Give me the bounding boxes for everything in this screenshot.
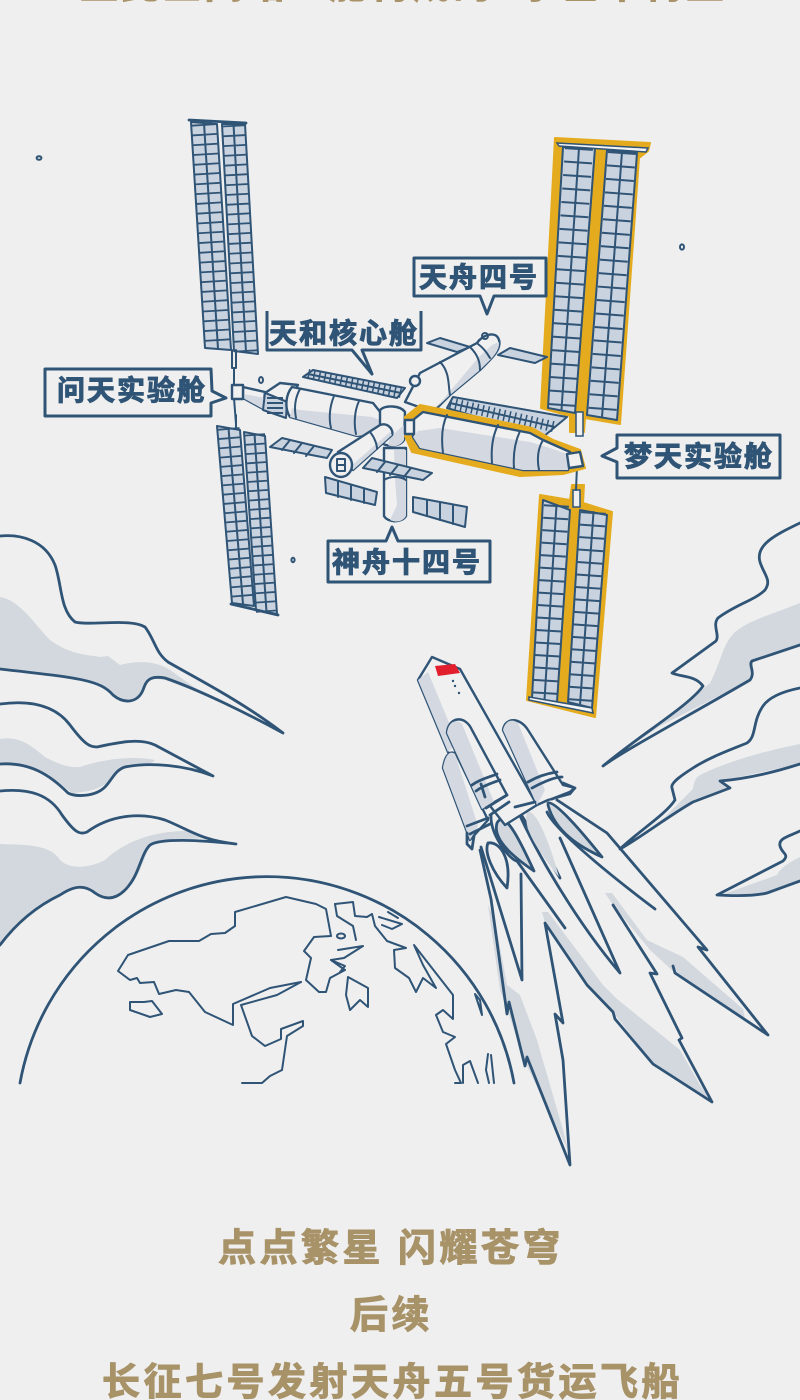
- label: Wentian module: [45, 369, 226, 416]
- clouds: left: [0, 536, 283, 945]
- rocket core stage: [418, 657, 537, 825]
- closing caption: [102, 1228, 683, 1400]
- label: Tianhe core module: [267, 311, 421, 374]
- Shenzhou-14 crewed craft with panels: [325, 448, 467, 527]
- solar array: Mengtian lower, highlighted in yellow: [527, 466, 612, 717]
- line: twinkling stars: 点点繁星 闪耀苍穹: [218, 1228, 564, 1270]
- rocket and exhaust flames: [418, 657, 768, 1165]
- solar array: Wentian lower: [217, 398, 278, 615]
- continents: [118, 897, 494, 1083]
- exhaust flames: [480, 800, 768, 1165]
- Tianzhou-4 cargo craft with panels: [405, 333, 547, 412]
- label: Mengtian module: 梦天实验舱: [624, 441, 774, 472]
- Tianhe core module: [232, 377, 385, 436]
- centre booster: [447, 719, 509, 815]
- line: follow-up: 后续: [350, 1295, 433, 1337]
- solar array: Wentian upper: [189, 120, 258, 386]
- clouds: right: [603, 523, 800, 896]
- star dots: [37, 156, 684, 562]
- space station core: [232, 333, 585, 527]
- label: Tianhe core module: 天和核心舱: [269, 318, 419, 349]
- label: Wentian module: 问天实验舱: [57, 375, 207, 406]
- left booster: [443, 753, 490, 849]
- earth globe with continents: [20, 877, 514, 1083]
- Mengtian solar wing: [447, 397, 567, 437]
- top caption cut off by the page edge: [80, 0, 728, 7]
- right booster: [503, 720, 575, 807]
- solar array: Mengtian upper, highlighted in yellow: [541, 138, 650, 436]
- Tianhe solar wing: [303, 370, 405, 398]
- label: Mengtian module: [602, 435, 780, 478]
- label: Shenzhou-14: [328, 527, 490, 582]
- central node: [380, 406, 405, 446]
- label: Tianzhou-4: [414, 258, 546, 314]
- red nose stripe: [435, 664, 460, 676]
- Mengtian laboratory module with yellow outline: [405, 405, 585, 476]
- label: Shenzhou-14: 神舟十四号: [332, 547, 482, 578]
- label: Tianzhou-4: 天舟四号: [419, 262, 539, 293]
- docked forward craft with end circle: [270, 424, 432, 480]
